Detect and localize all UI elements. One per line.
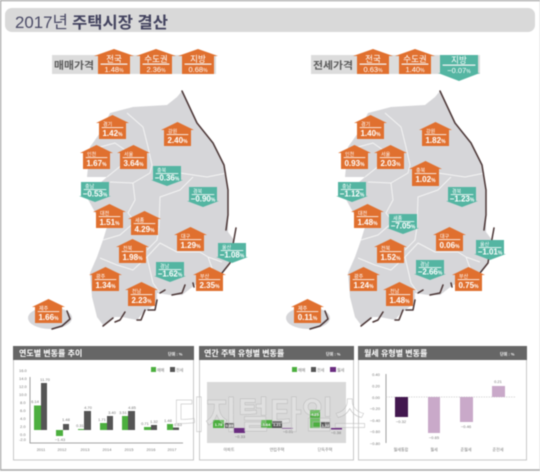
region values: sale price: 대전 [100, 210, 110, 217]
region values: jeonse price: 1.48% [357, 218, 378, 227]
region values: jeonse price: 울산 [480, 241, 490, 248]
region values: sale price: 세종 [135, 217, 145, 224]
panel: annual change by housing type: 월세 [337, 366, 345, 372]
panel: sale price summary: 지방 [190, 54, 206, 64]
region values: sale price: 2.35% [199, 281, 220, 290]
panel: monthly rent change by type: −0.20 [370, 406, 381, 411]
panel: jeonse price summary [311, 49, 480, 81]
panel: annual change by housing type: 1.21 [273, 422, 282, 427]
panel: jeonse price summary: 전세가격 [313, 59, 353, 72]
panel: yearly change chart: 3.40 [108, 410, 117, 415]
panel: jeonse price summary: 전국 [365, 54, 381, 64]
region values: jeonse price: 제주 [298, 305, 308, 312]
panel: monthly rent change by type: 0.00 [372, 395, 381, 400]
region values: jeonse price: 충남 [342, 183, 352, 190]
region values: jeonse price: 부산 [459, 273, 469, 280]
region values: sale price: 서울 [124, 151, 134, 158]
panel: yearly change chart: 16.0 [19, 368, 28, 373]
region values: sale price: 충남 [85, 183, 95, 190]
region values: sale price: 1.51% [99, 218, 120, 227]
panel: yearly change chart: 6.14 [31, 399, 40, 404]
panel: sale price summary [52, 49, 218, 74]
panel: sale price summary: 전국 [106, 54, 122, 64]
region values: jeonse price: 경기 [361, 121, 370, 128]
panel: annual change by housing type: 전세 [317, 366, 325, 372]
panel: monthly rent change by type: 준월세 [460, 446, 472, 452]
panel: annual change by housing type: −0.33 [235, 434, 246, 439]
panel: monthly rent change by type: 0.40 [372, 372, 381, 377]
region values: sale price: 충북 [157, 167, 167, 174]
panel: yearly change chart: 4.0 [20, 416, 26, 421]
panel: monthly rent change by type: −0.46 [461, 424, 472, 429]
region values: sale price: 울산 [222, 244, 232, 251]
region values: jeonse price: 1.48% [389, 296, 410, 305]
region values: sale price: 2.23% [131, 296, 152, 305]
region values: jeonse price: 세종 [393, 215, 403, 222]
region values: jeonse price: 1.24% [353, 281, 374, 290]
panel: jeonse price summary: 1.40% [405, 65, 425, 74]
panel: monthly rent change by type: 단위 : % [500, 350, 515, 356]
panel: yearly change chart: 4.85 [128, 405, 137, 410]
region values: sale price: 전북 [123, 245, 133, 252]
region values: jeonse price: 대전 [358, 210, 368, 217]
panel: yearly change chart: 8.0 [20, 400, 26, 405]
panel: annual change by housing type: 0.89 [226, 423, 234, 428]
panel: yearly change chart: 2012 [58, 447, 67, 452]
region values: jeonse price: 경남 [420, 261, 430, 268]
panel: yearly change chart: 6.0 [20, 408, 26, 413]
title bar: 2017년 [15, 13, 68, 32]
panel: annual change by housing type [199, 346, 354, 460]
region values: sale price: 경남 [160, 263, 170, 270]
panel: yearly change chart: 0.31 [76, 423, 85, 428]
region values: jeonse price: 0.11% [298, 313, 318, 322]
panel: monthly rent change by type: −0.80 [370, 441, 381, 446]
panel: sale price summary: 1.48% [104, 65, 124, 74]
region values: jeonse price: 0.93% [344, 159, 365, 168]
panel: sale price summary: 매매가격 [54, 59, 94, 72]
panel: yearly change chart: 2014 [103, 447, 112, 452]
panel: yearly change chart: 2016 [147, 447, 156, 452]
region values: jeonse price: 충북 [416, 167, 426, 174]
panel: annual change by housing type: −0.01 [283, 429, 294, 434]
panel: yearly change chart: 12.0 [19, 384, 28, 389]
region values: sale price: 강원 [168, 128, 178, 135]
region values: jeonse price: −1.01% [478, 248, 503, 256]
region values: sale price: 인천 [87, 151, 97, 158]
region values: jeonse price: 0.06% [439, 241, 460, 250]
region values: jeonse price: 2.03% [380, 159, 401, 168]
region values: sale price: 2.40% [167, 136, 188, 145]
region values: jeonse price: 1.82% [425, 136, 446, 145]
panel: yearly change chart: 2.0 [20, 424, 26, 429]
panel: monthly rent change by type: −0.40 [370, 418, 381, 423]
region values: sale price: 제주 [39, 305, 49, 312]
panel: yearly change chart: 4.70 [84, 405, 93, 410]
region values: jeonse price: 대구 [440, 233, 450, 240]
region values: sale price: 1.42% [102, 129, 123, 138]
title bar [5, 8, 535, 32]
region values: sale price: −0.90% [191, 194, 216, 204]
region values: sale price: 1.67% [86, 159, 107, 168]
coastline: sale map [52, 91, 236, 329]
region values: jeonse price: 1.40% [360, 129, 381, 138]
panel: monthly rent change by type: 준전세 [492, 446, 504, 452]
panel: jeonse price summary: −0.07% [447, 66, 471, 75]
panel: annual change by housing type: 단위 : % [326, 350, 341, 356]
panel: annual change by housing type: −0.38 [331, 430, 342, 435]
map: jeonse price [286, 91, 492, 329]
watermark: 디지털타임스 [173, 395, 366, 436]
panel: annual change by housing type: 연립주택 [270, 446, 285, 452]
panel: annual change by housing type: 1.64 [263, 422, 271, 427]
panel: sale price summary: 수도권 [144, 54, 168, 64]
region values: jeonse price: 경북 [452, 188, 462, 195]
region values: sale price: 부산 [200, 273, 210, 280]
region values: jeonse price: 강원 [426, 128, 436, 135]
region values: jeonse price: 1.02% [415, 175, 436, 184]
panel: yearly change chart: 1.71 [98, 417, 107, 422]
region values: sale price: 경북 [193, 188, 203, 195]
panel: annual change by housing type: 단독주택 [318, 446, 333, 452]
region values: jeonse price: 인천 [345, 151, 355, 158]
panel: annual change by housing type: 아파트 [223, 446, 235, 452]
region values: sale price: 경기 [103, 121, 112, 128]
panel: jeonse price summary: 0.63% [363, 65, 383, 74]
title bar: 주택시장 결산 [72, 14, 168, 32]
region values: sale price: −1.08% [220, 250, 245, 260]
panel: yearly change chart: 2017 [168, 447, 177, 452]
region values: sale price: 대구 [181, 233, 191, 240]
panel: monthly rent change by type: 0.20 [372, 384, 381, 388]
panel: yearly change chart: 1.48 [164, 418, 173, 423]
region values: sale price: 1.29% [180, 241, 201, 250]
region values: sale price [32, 115, 248, 323]
region values: sale price: 3.64% [123, 159, 144, 168]
panel: yearly change chart: -2.0 [19, 437, 27, 442]
region values: sale price: 1.98% [122, 253, 143, 262]
panel: yearly change chart [13, 346, 194, 460]
panel: yearly change chart: 10.0 [19, 392, 28, 397]
panel: yearly change chart: 매매 [157, 366, 165, 372]
panel: yearly change chart: 2011 [37, 447, 46, 452]
panel: yearly change chart: 0.63 [174, 422, 183, 427]
panel: annual change by housing type: 1.02 [322, 423, 330, 428]
region values: jeonse price: −7.05% [391, 222, 416, 230]
region values: sale price: 광주 [96, 273, 106, 280]
region values: jeonse price: 1.52% [380, 253, 401, 262]
panel: yearly change chart: 전세 [176, 366, 184, 372]
panel: annual change by housing type: 매매 [298, 366, 306, 372]
region values: sale price: 1.66% [38, 313, 59, 322]
panel: monthly rent change by type: 월세통합 [394, 446, 409, 452]
panel: monthly rent change by type: 월세 [430, 446, 438, 452]
panel: yearly change chart: 0.0 [20, 432, 26, 437]
region values: sale price: 1.34% [95, 281, 116, 290]
region values: jeonse price: 서울 [381, 151, 391, 158]
panel: yearly change chart: 0.71 [141, 421, 150, 426]
panel: monthly rent change by type: −0.60 [370, 429, 381, 434]
panel: monthly rent change by type: −0.65 [429, 435, 440, 440]
panel: yearly change chart: 1.32 [150, 419, 159, 424]
panel: yearly change chart: 연도별 변동률 추이 [19, 348, 82, 358]
map: sale price [28, 91, 234, 329]
region values: jeonse price: −2.66% [418, 268, 443, 276]
panel: yearly change chart: 3.51 [119, 410, 128, 415]
panel: jeonse price summary: 수도권 [403, 54, 427, 64]
region values: sale price: 전남 [132, 288, 142, 295]
panel: annual change by housing type: 1.78 [215, 422, 223, 427]
region values: jeonse price [291, 115, 506, 323]
panel: monthly rent change by type [358, 346, 527, 460]
panel: monthly rent change by type: −0.32 [396, 419, 407, 424]
region values: sale price: 4.29% [134, 225, 155, 234]
region values: sale price: −1.62% [158, 270, 183, 278]
region values: jeonse price: 0.75% [458, 281, 479, 290]
panel: yearly change chart: 1.48 [62, 417, 71, 422]
region values: jeonse price: 광주 [354, 273, 364, 280]
panel: yearly change chart: 14.0 [19, 376, 28, 381]
panel: sale price summary: 0.68% [188, 65, 208, 74]
panel: yearly change chart: 단위 : % [168, 350, 183, 356]
region values: sale price: −0.53% [83, 190, 108, 198]
coastline: jeonse map [310, 91, 494, 329]
region values: jeonse price: 전남 [390, 288, 400, 295]
panel: annual change by housing type: 연간 주택 유형별 변동률 [204, 348, 285, 358]
panel: yearly change chart: 11.70 [40, 377, 51, 382]
panel: monthly rent change by type: 0.21 [494, 379, 503, 384]
panel: yearly change chart: 2013 [81, 447, 90, 452]
region values: jeonse price: −1.23% [450, 194, 475, 204]
panel: jeonse price summary: 지방 [451, 55, 467, 65]
region values: jeonse price: 전북 [381, 245, 391, 252]
panel: yearly change chart: 2015 [125, 447, 134, 452]
panel: yearly change chart: −1.43 [55, 437, 66, 442]
region values: jeonse price: −1.12% [340, 190, 365, 198]
panel: monthly rent change by type: 월세 유형별 변동률 [364, 348, 428, 358]
panel: sale price summary: 2.36% [146, 65, 166, 74]
region values: sale price: −0.36% [155, 174, 180, 182]
panel: annual change by housing type: 4.25 [311, 412, 320, 417]
